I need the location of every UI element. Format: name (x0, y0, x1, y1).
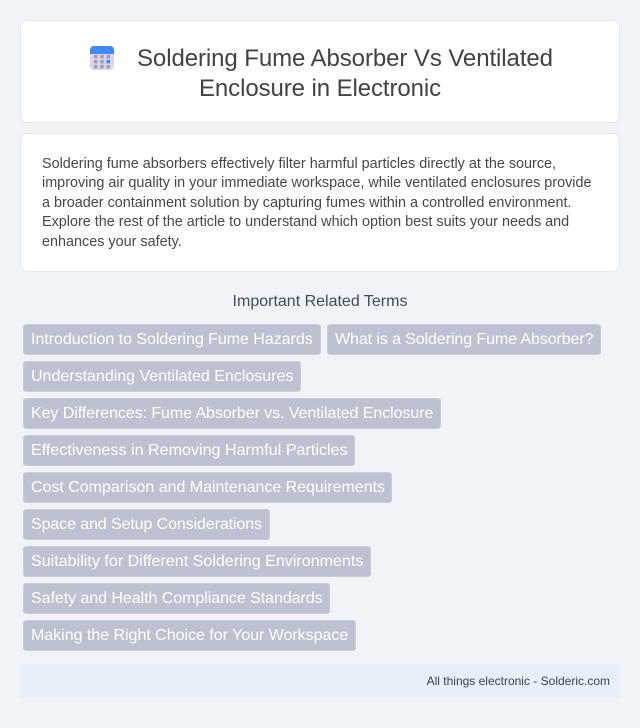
tag: Effectiveness in Removing Harmful Particles (31, 442, 348, 459)
intro paragraph: Soldering fume absorbers effectively filter harmful particles directly at the source, (42, 156, 556, 172)
intro paragraph: improving air quality in your immediate workspace, while ventilated enclosures provide (42, 175, 592, 191)
title: Soldering Fume Absorber Vs Ventilated (137, 45, 553, 72)
title: Enclosure in Electronic (199, 75, 441, 102)
panel: introduction text (20, 133, 620, 272)
tag: Suitability for Different Soldering Environments (31, 553, 363, 570)
tag (23, 324, 321, 355)
tag: Safety and Health Compliance Standards (31, 590, 323, 607)
tag: Space and Setup Considerations (31, 516, 262, 533)
tag: Key Differences: Fume Absorber vs. Ventilated Enclosure (31, 405, 433, 422)
tag: What is a Soldering Fume Absorber? (335, 331, 593, 348)
tag: Cost Comparison and Maintenance Requirements (31, 479, 385, 496)
intro paragraph (42, 156, 592, 250)
intro paragraph: a broader containment solution by capturing fumes within a controlled environment. (42, 195, 572, 211)
intro paragraph: enhances your safety. (42, 234, 182, 250)
tag (23, 546, 371, 577)
tag (23, 509, 270, 540)
tag (23, 583, 330, 614)
tag (23, 361, 301, 392)
tag: Making the Right Choice for Your Workspace (31, 627, 348, 644)
icon: calendar grid (90, 46, 114, 70)
heading: important related terms: Important Related Terms (233, 293, 407, 310)
title (137, 45, 553, 102)
tag: Understanding Ventilated Enclosures (31, 368, 293, 385)
intro paragraph: Explore the rest of the article to understand which option best suits your needs and (42, 214, 569, 230)
tag list (23, 324, 601, 651)
tag (23, 435, 355, 466)
tag (23, 620, 356, 651)
tag (23, 398, 441, 429)
footer text: All things electronic - Solderic.com (427, 674, 610, 688)
panel: title card (20, 20, 620, 123)
footer bar (20, 664, 620, 698)
tag (327, 324, 601, 355)
tag (23, 472, 392, 503)
tag: Introduction to Soldering Fume Hazards (31, 331, 313, 348)
